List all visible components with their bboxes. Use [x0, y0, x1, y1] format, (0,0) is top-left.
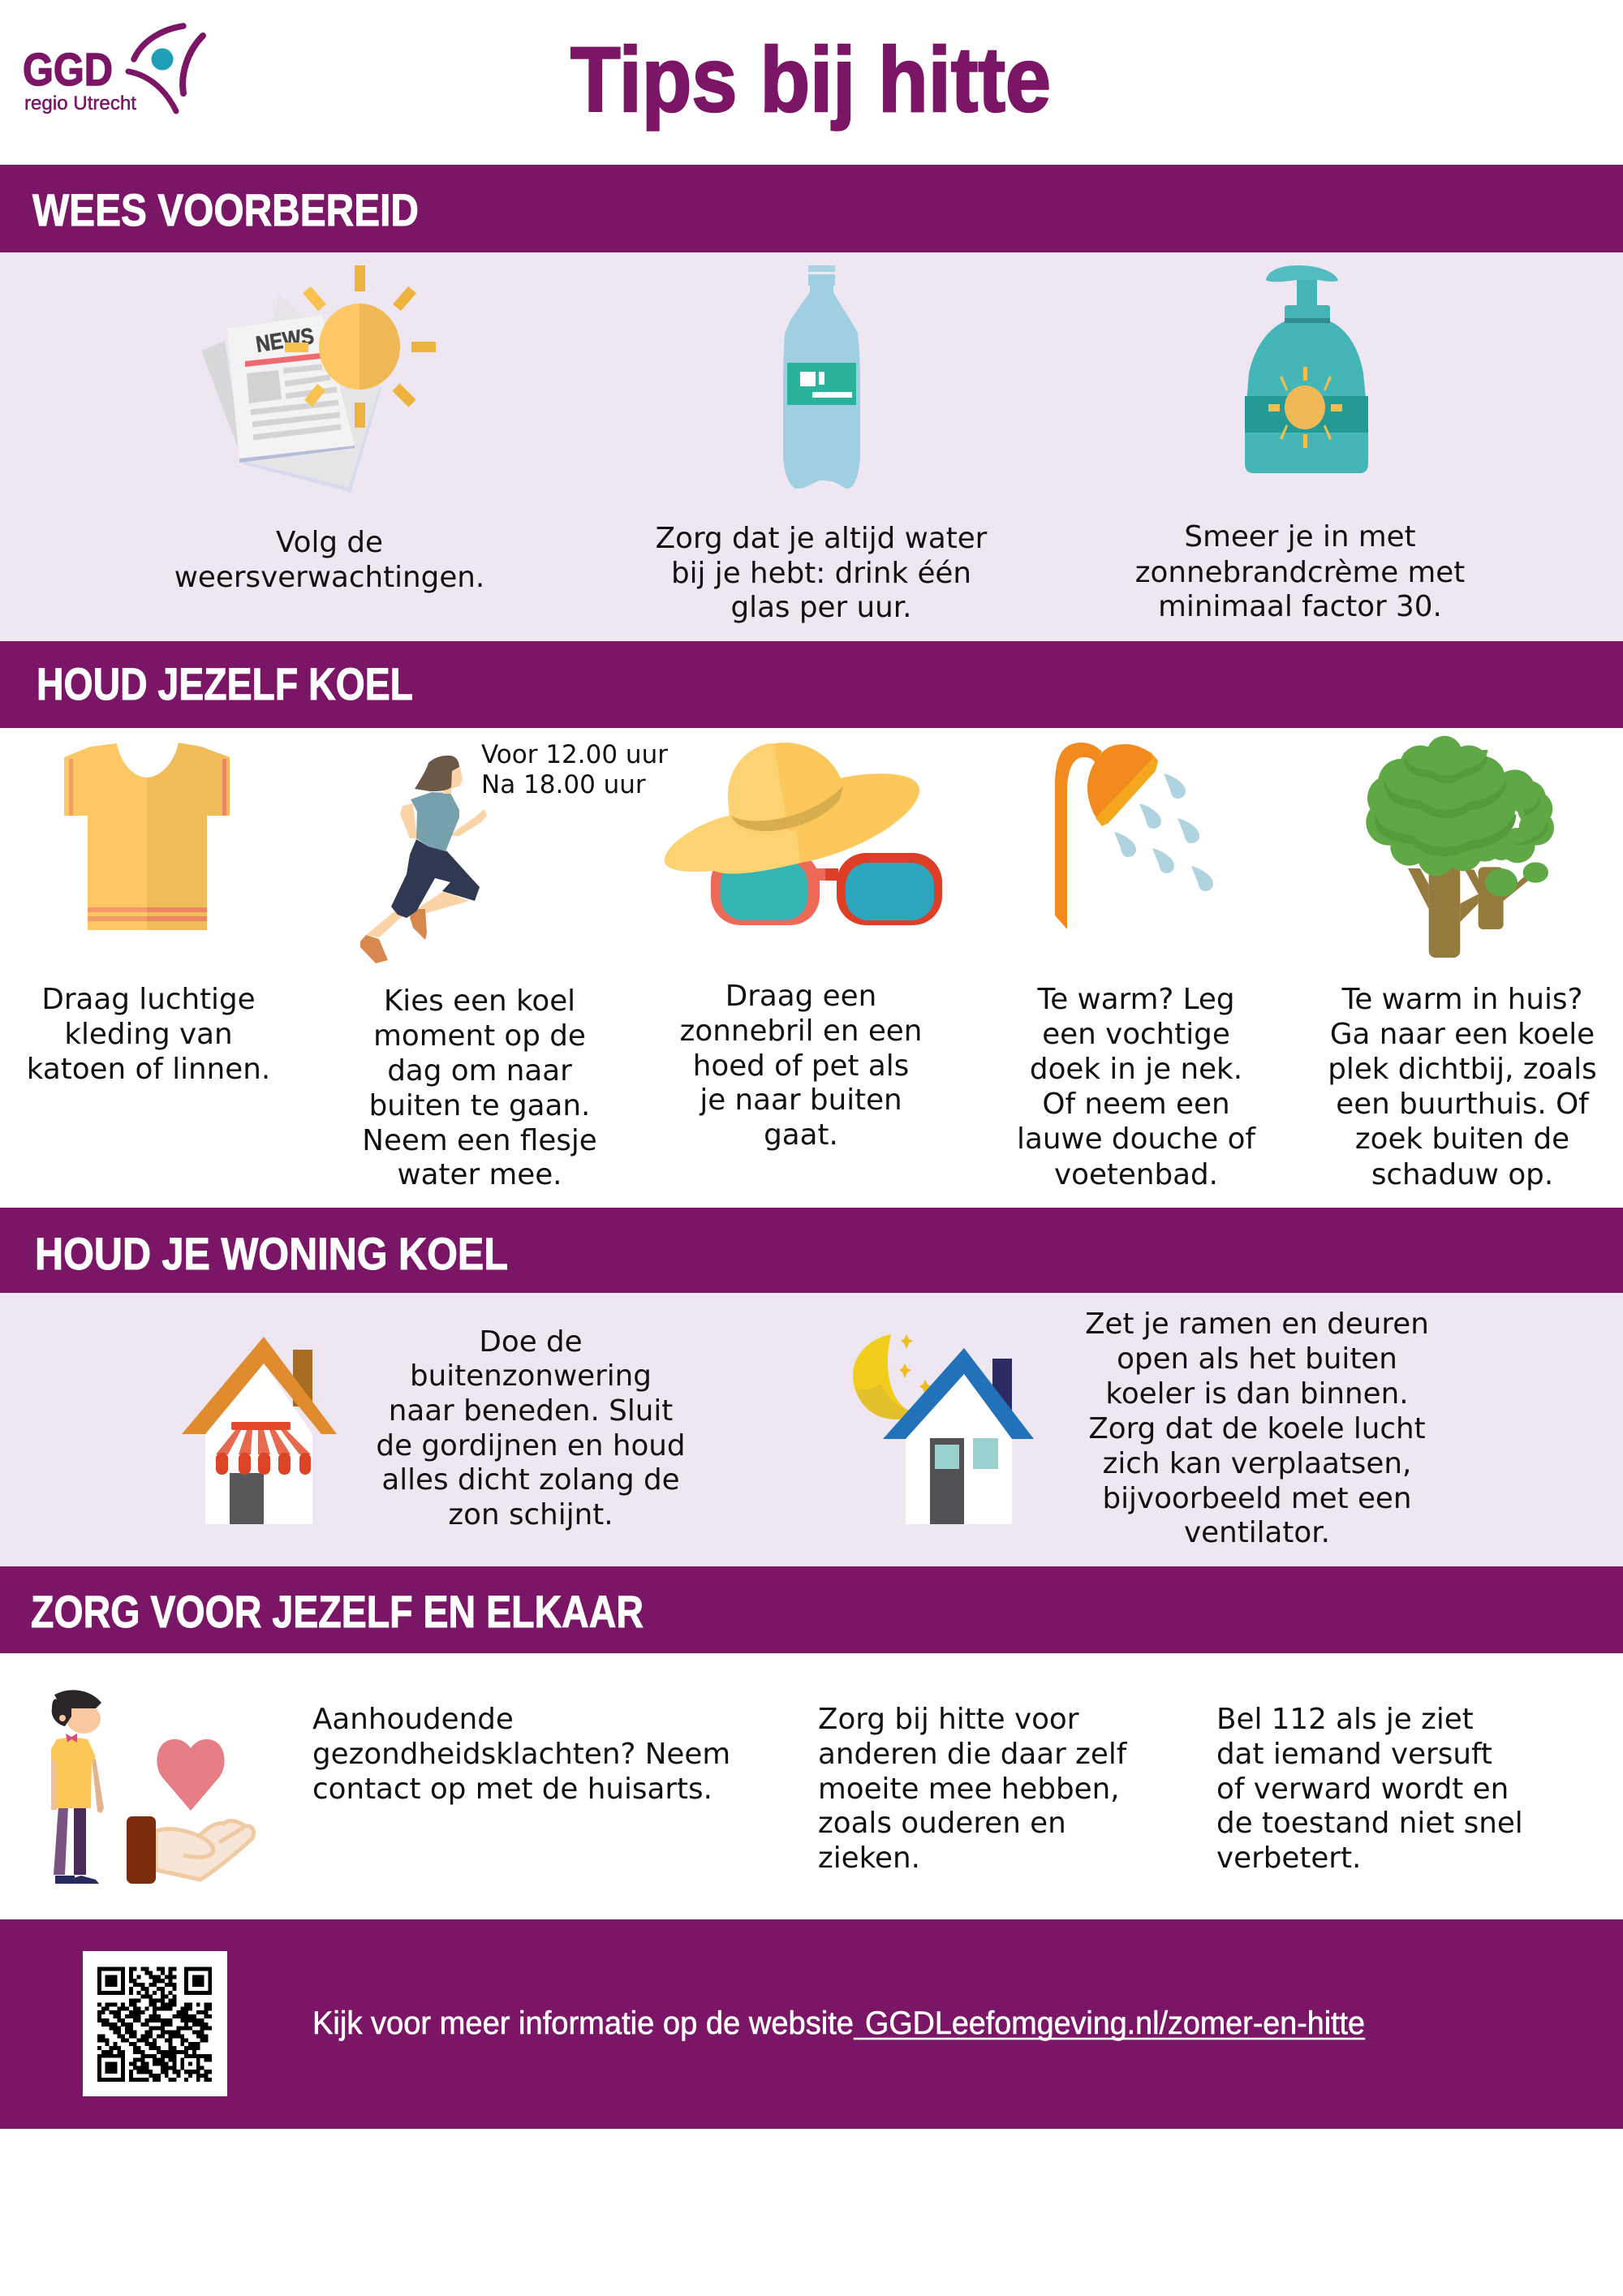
icon: person — [51, 1690, 104, 1884]
section heading: zorg voor jezelf en elkaar: ZORG VOOR JEZELF EN ELKAAR — [31, 1586, 644, 1637]
text: website link — [312, 2005, 1365, 2041]
icon: runner: Voor 12.00 uur — [481, 740, 668, 769]
text: ramen en deuren: Zet je ramen en deuren — [1085, 1307, 1429, 1341]
text: buitenzonwering: zon schijnt. — [448, 1498, 613, 1531]
text: zorg voor anderen: anderen die daar zelf — [818, 1738, 1128, 1771]
icon: tree — [1366, 736, 1554, 958]
text: kleding: katoen of linnen. — [27, 1053, 270, 1086]
text: website link: Kijk voor meer informatie op de website — [312, 2005, 854, 2041]
text: buitenzonwering: buitenzonwering — [410, 1359, 652, 1393]
text: koele plek: schaduw op. — [1371, 1158, 1553, 1191]
text: zonnebril: zonnebril en een — [680, 1014, 922, 1048]
section heading: houd je woning koel — [0, 1208, 1623, 1293]
text: zorg voor anderen: zieken. — [818, 1842, 920, 1875]
icon: runner: Na 18.00 uur — [481, 770, 646, 799]
text: zonnebril — [680, 980, 922, 1152]
icon: t-shirt — [64, 743, 230, 930]
text: vochtige doek: doek in je nek. — [1030, 1053, 1242, 1086]
logo: GGD regio Utrecht: regio Utrecht — [24, 93, 136, 114]
text: koele plek: zoek buiten de — [1355, 1122, 1569, 1156]
text: water: bij je hebt: drink één — [671, 557, 971, 590]
text: ramen en deuren: zich kan verplaatsen, — [1103, 1447, 1411, 1480]
text: huisarts: gezondheidsklachten? Neem — [312, 1738, 730, 1771]
text: zonnebrandcreme: minimaal factor 30. — [1158, 590, 1442, 623]
icon: newspaper and sun — [201, 265, 436, 493]
icon: house with awning — [182, 1337, 337, 1524]
text: kleding: Draag luchtige — [41, 983, 256, 1016]
icon: sunscreen pump bottle — [1245, 265, 1368, 473]
icon: water bottle — [783, 265, 860, 489]
text: zonnebrandcreme: zonnebrandcrème met — [1135, 556, 1465, 589]
section heading: wees voorbereid: WEES VOORBEREID — [32, 184, 419, 235]
text: website link: GGDLeefomgeving.nl/zomer-en-hitte — [865, 2005, 1365, 2041]
text: water: glas per uur. — [731, 591, 911, 624]
text: buitenzonwering: alles dicht zolang de — [381, 1463, 680, 1497]
icon: house at night with moon — [853, 1334, 1034, 1524]
text: koel moment: buiten te gaan. — [369, 1089, 590, 1122]
text: koel moment — [362, 984, 597, 1191]
text: buitenzonwering: Doe de — [479, 1325, 583, 1359]
text: koele plek: Ga naar een koele — [1330, 1018, 1595, 1051]
text: buitenzonwering: de gordijnen en houd — [376, 1429, 686, 1462]
text: zorg voor anderen — [818, 1703, 1128, 1875]
text: vochtige doek: lauwe douche of — [1017, 1122, 1256, 1156]
text: zonnebril: gaat. — [764, 1118, 838, 1152]
panel: wees voorbereid — [0, 165, 1623, 641]
text: koel moment: water mee. — [397, 1158, 562, 1191]
text: huisarts: contact op met de huisarts. — [312, 1773, 712, 1806]
text: buitenzonwering: naar beneden. Sluit — [389, 1394, 673, 1428]
section heading: houd je woning koel: HOUD JE WONING KOEL — [35, 1228, 508, 1279]
text: buitenzonwering — [376, 1325, 686, 1531]
panel: houd jezelf koel — [0, 641, 1623, 1191]
text: bel 112: Bel 112 als je ziet — [1216, 1703, 1474, 1736]
section heading: zorg voor jezelf en elkaar — [0, 1566, 1623, 1653]
icon: newspaper and sun: NEWS — [254, 323, 316, 357]
QR code — [83, 1951, 227, 2096]
text: koele plek: Te warm in huis? — [1341, 983, 1582, 1016]
text: ramen en deuren: ventilator. — [1184, 1516, 1330, 1549]
text: water: Zorg dat je altijd water — [656, 522, 988, 555]
logo: GGD regio Utrecht: GGD — [23, 44, 113, 96]
section heading: houd jezelf koel: HOUD JEZELF KOEL — [37, 658, 413, 709]
text: zorg voor anderen: moeite mee hebben, — [818, 1773, 1120, 1806]
text: weersverwachtingen: weersverwachtingen. — [174, 561, 484, 594]
text: bel 112: dat iemand versuft — [1216, 1738, 1492, 1771]
text: zonnebril: Draag een — [725, 980, 876, 1013]
panel: houd je woning koel — [0, 1208, 1623, 1566]
panel: zorg voor jezelf en elkaar — [0, 1566, 1623, 1884]
icon: runner — [360, 740, 668, 963]
icon: shower — [1055, 743, 1213, 929]
text: koele plek: een buurthuis. Of — [1336, 1088, 1590, 1121]
text: koel moment: Kies een koel — [384, 984, 575, 1018]
text: koel moment: Neem een flesje — [362, 1124, 597, 1157]
text: vochtige doek: een vochtige — [1042, 1018, 1230, 1051]
text: weersverwachtingen: Volg de — [276, 526, 383, 559]
text: bel 112: verbetert. — [1216, 1842, 1361, 1875]
text: huisarts — [312, 1703, 730, 1806]
text: kleding — [27, 983, 270, 1086]
text: zonnebrandcreme — [1135, 520, 1465, 623]
section heading: wees voorbereid — [0, 165, 1623, 252]
text: koel moment: moment op de — [373, 1019, 586, 1053]
panel: footer — [0, 1919, 1623, 2129]
icon: hand with heart — [127, 1739, 254, 1884]
text: zonnebril: je naar buiten — [699, 1083, 902, 1117]
text: ramen en deuren: bijvoorbeeld met een — [1102, 1482, 1412, 1515]
text: huisarts: Aanhoudende — [312, 1703, 514, 1736]
icon: hat and sunglasses — [665, 743, 942, 925]
text: koele plek: plek dichtbij, zoals — [1328, 1053, 1597, 1086]
title: Tips bij hitte — [570, 28, 1051, 131]
text: ramen en deuren: open als het buiten — [1117, 1342, 1397, 1376]
text: vochtige doek: Te warm? Leg — [1036, 983, 1235, 1016]
text: kleding: kleding van — [64, 1018, 233, 1051]
text: bel 112 — [1216, 1703, 1523, 1875]
text: bel 112: of verward wordt en — [1216, 1773, 1509, 1806]
text: zonnebril: hoed of pet als — [693, 1049, 909, 1083]
text: ramen en deuren: Zorg dat de koele lucht — [1088, 1412, 1426, 1445]
text: water — [656, 522, 988, 624]
section heading: houd jezelf koel — [0, 641, 1623, 728]
text: vochtige doek: voetenbad. — [1054, 1158, 1218, 1191]
text: zorg voor anderen: Zorg bij hitte voor — [818, 1703, 1079, 1736]
text: vochtige doek: Of neem een — [1042, 1088, 1230, 1121]
text: weersverwachtingen — [174, 526, 484, 594]
text: ramen en deuren: koeler is dan binnen. — [1105, 1377, 1409, 1411]
text: ramen en deuren — [1085, 1307, 1429, 1549]
logo: GGD regio Utrecht — [23, 26, 203, 114]
text: zorg voor anderen: zoals ouderen en — [818, 1807, 1066, 1840]
text: koel moment: dag om naar — [387, 1054, 572, 1088]
text: bel 112: de toestand niet snel — [1216, 1807, 1523, 1840]
text: zonnebrandcreme: Smeer je in met — [1184, 520, 1416, 554]
text: koele plek — [1328, 983, 1597, 1191]
text: vochtige doek — [1017, 983, 1256, 1191]
